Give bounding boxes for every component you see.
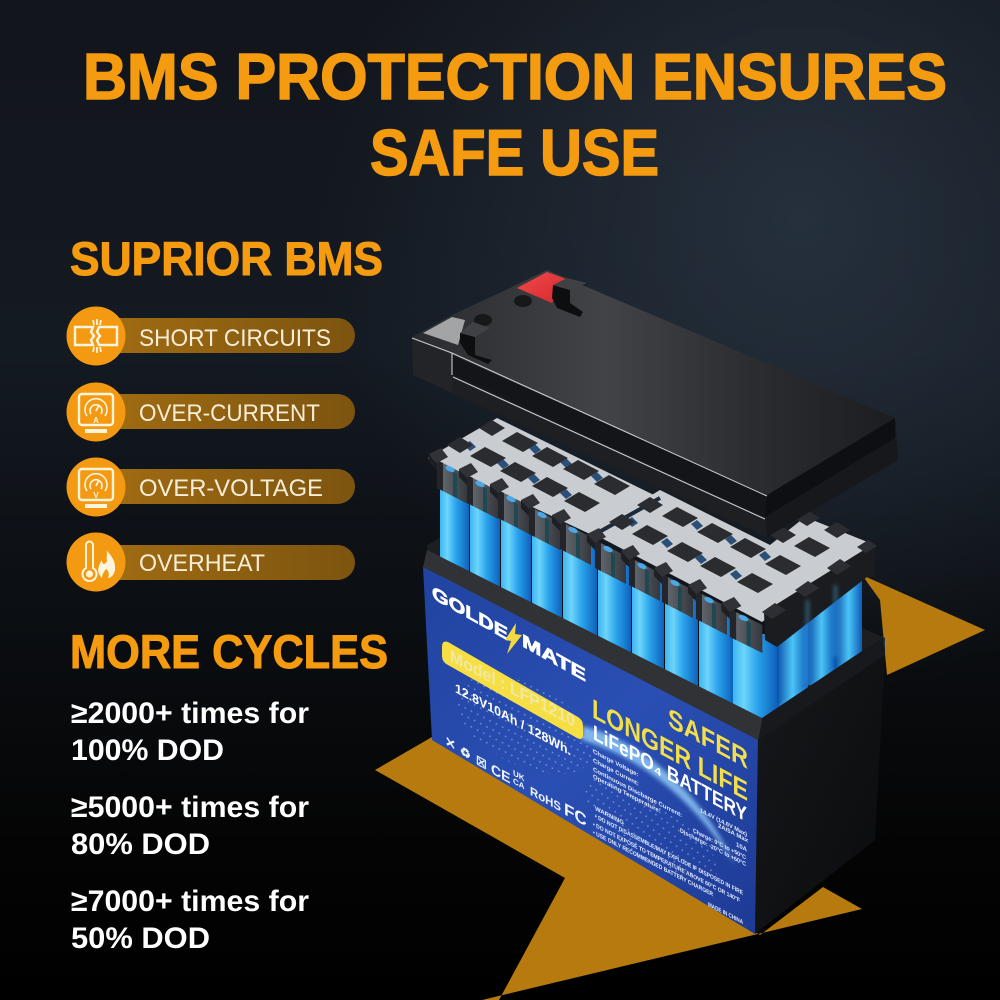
certification marks: UK	[513, 768, 525, 784]
icon: ammeter	[79, 394, 113, 431]
certification marks: ♻	[460, 743, 471, 763]
cycle list: 80% DOD	[71, 828, 210, 861]
brand logo: MATE	[522, 630, 586, 687]
small specifications: WARNING	[595, 805, 624, 827]
battery case side	[755, 655, 885, 934]
headline: lifepo4 battery: LiFePO₄ BATTERY	[593, 720, 747, 827]
certification marks: CA	[513, 776, 525, 791]
negative terminal pad	[423, 317, 465, 345]
lid left wall	[412, 337, 452, 393]
headline: longer life: LONGER LIFE	[592, 694, 748, 808]
lid lower skirt front	[452, 375, 767, 537]
battery module top: busbar plates	[428, 418, 875, 622]
cycle list: ≥5000+ times for	[71, 791, 309, 824]
title: SAFE USE	[370, 116, 659, 189]
small specifications: 14.4V (14.6V Max)	[700, 807, 747, 838]
label: over-voltage: OVER-VOLTAGE	[139, 475, 323, 502]
battery module top: back tabs	[447, 420, 850, 543]
heading: suprior bms: SUPRIOR BMS	[70, 232, 383, 285]
small specifications: 2A/5A Max	[718, 822, 748, 845]
positive terminal	[514, 278, 587, 317]
battery module top: module divider	[592, 498, 660, 536]
brand logo	[432, 582, 586, 687]
label glow swoosh	[582, 726, 735, 865]
cycle list: 50% DOD	[71, 922, 210, 955]
label dot field	[440, 655, 732, 899]
lid right wall	[765, 418, 895, 517]
cycle list	[71, 697, 309, 955]
battery cells: side row	[777, 575, 862, 710]
battery label	[423, 567, 758, 934]
small specifications: 10A	[736, 841, 747, 854]
certification marks: ☒	[476, 753, 487, 773]
battery cells: front row	[440, 485, 777, 739]
icon: ammeter: A	[93, 416, 99, 425]
certification marks: FC	[564, 798, 587, 830]
lid edge highlights	[412, 338, 767, 519]
small specifications: Continuous Discharge Current:	[593, 766, 682, 819]
cycle list: ≥7000+ times for	[71, 885, 309, 918]
certification marks: CE	[491, 761, 510, 787]
battery label: Model : LFP1210	[450, 646, 575, 731]
cycle list: ≥2000+ times for	[71, 697, 309, 730]
spec text: 12.8V10Ah / 128Wh.	[455, 680, 571, 759]
negative terminal	[460, 314, 492, 364]
small specifications: Charge Voltage:	[593, 748, 638, 779]
battery illustration	[412, 270, 898, 934]
small specifications: Discharge: -20°C to +60°C	[680, 826, 746, 868]
icon: thermometer and flame	[82, 542, 115, 581]
label: short circuits: SHORT CIRCUITS	[139, 325, 331, 352]
small specifications: • DO NOT EXPOSE TO TEMPERATURE ABOVE 60°C OR 140°F	[593, 820, 740, 904]
title	[83, 40, 947, 189]
lid top face	[412, 270, 895, 495]
right-hand caps	[764, 543, 875, 647]
protection item: over-current	[66, 382, 355, 442]
small specifications: Operating Temperature:	[593, 773, 661, 815]
battery module top: blue gaps between pads	[464, 441, 771, 580]
icon: voltmeter: V	[93, 491, 99, 500]
headline: safer: SAFER	[668, 703, 748, 776]
label: overheat: OVERHEAT	[139, 550, 265, 577]
battery lid	[412, 270, 898, 537]
title: BMS PROTECTION ENSURES	[83, 40, 947, 113]
protection item: short circuits	[66, 306, 355, 366]
certification marks	[445, 730, 587, 830]
icon: broken conductor	[75, 319, 117, 353]
cycle list: 100% DOD	[71, 734, 224, 767]
small specifications: • USE ONLY RECOMMENDED BATTERY CHARGER	[593, 829, 713, 898]
battery cell caps	[429, 448, 877, 653]
battery case rim	[423, 550, 885, 741]
protection item: overheat	[66, 532, 355, 592]
certification marks: ✕	[445, 733, 456, 754]
lightning bolt shape	[375, 575, 985, 1000]
heading: more cycles: MORE CYCLES	[70, 625, 388, 678]
label: over-current: OVER-CURRENT	[139, 400, 320, 427]
battery module top: dark pads	[470, 432, 830, 593]
small specifications: • DO NOT DISASSEMBLE/MAY EXPLODE IF DISPOSED IN FIRE	[595, 813, 743, 897]
battery cell glow	[440, 562, 885, 727]
small specifications: Charge Current:	[593, 757, 639, 788]
small specifications	[593, 748, 748, 926]
protection item: over-voltage	[66, 458, 355, 516]
model badge	[442, 642, 583, 739]
battery back rim	[427, 537, 885, 660]
brand logo: GOLDE	[432, 582, 508, 645]
small specifications: MADE IN CHINA	[708, 901, 743, 926]
certification marks: RoHS	[530, 783, 561, 815]
small specifications: Charge: 0°C to +50°C	[693, 826, 746, 862]
brand bolt	[505, 623, 522, 654]
lid lower skirt	[413, 353, 898, 537]
positive terminal pad	[517, 272, 566, 303]
lid front wall	[452, 353, 767, 517]
icon: voltmeter	[79, 469, 113, 506]
